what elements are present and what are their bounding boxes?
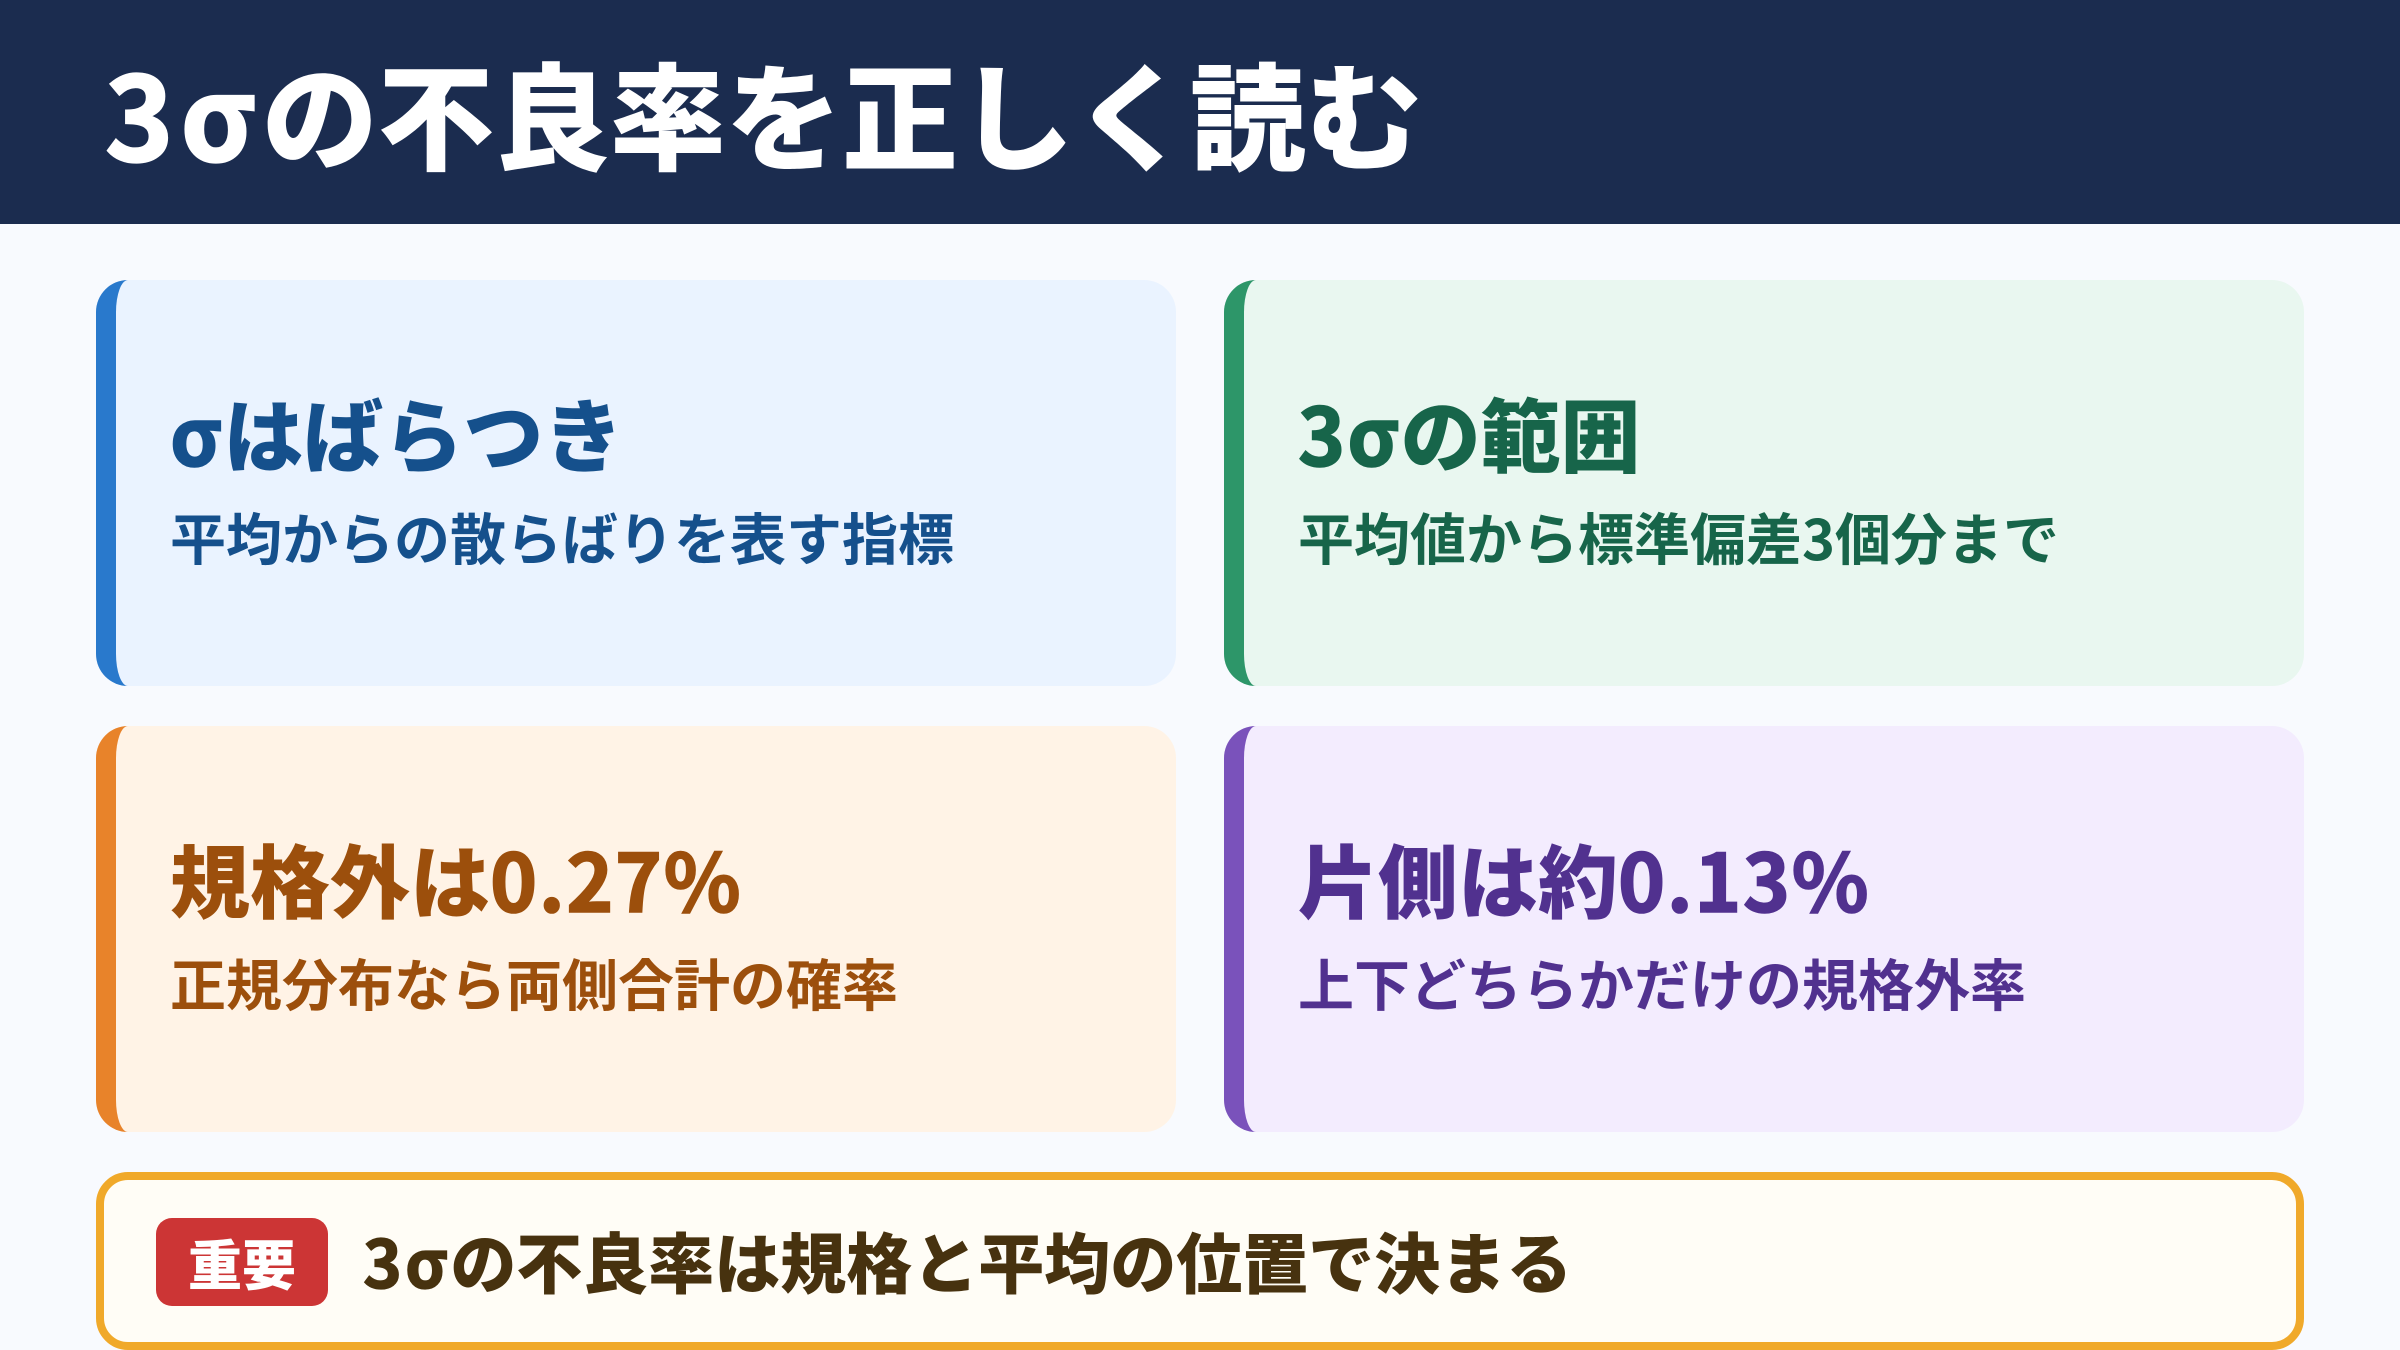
badge: important [156, 1218, 328, 1306]
panel description: 平均からの散らばりを表す指標 [170, 496, 954, 577]
panel: 3 sigma range [1224, 280, 2304, 686]
header band [0, 0, 2400, 224]
panel heading: σはばらつき [170, 374, 623, 490]
panel description: 平均値から標準偏差3個分まで [1298, 496, 2059, 577]
panel: one side 0.13% [1224, 726, 2304, 1132]
callout text: 3σの不良率は規格と平均の位置で決まる [363, 1212, 1572, 1308]
panel description: 正規分布なら両側合計の確率 [170, 942, 898, 1023]
panel heading: 3σの範囲 [1298, 374, 1641, 490]
callout: key point [96, 1172, 2304, 1350]
badge: important: 重要 [188, 1222, 296, 1301]
panel description: 上下どちらかだけの規格外率 [1298, 942, 2026, 1023]
panel: out of spec 0.27% [96, 726, 1176, 1132]
panel heading: 片側は約0.13% [1298, 820, 1870, 936]
title: 3σの不良率を正しく読む [105, 27, 1422, 195]
panel: sigma is dispersion [96, 280, 1176, 686]
panel heading: 規格外は0.27% [170, 820, 742, 936]
